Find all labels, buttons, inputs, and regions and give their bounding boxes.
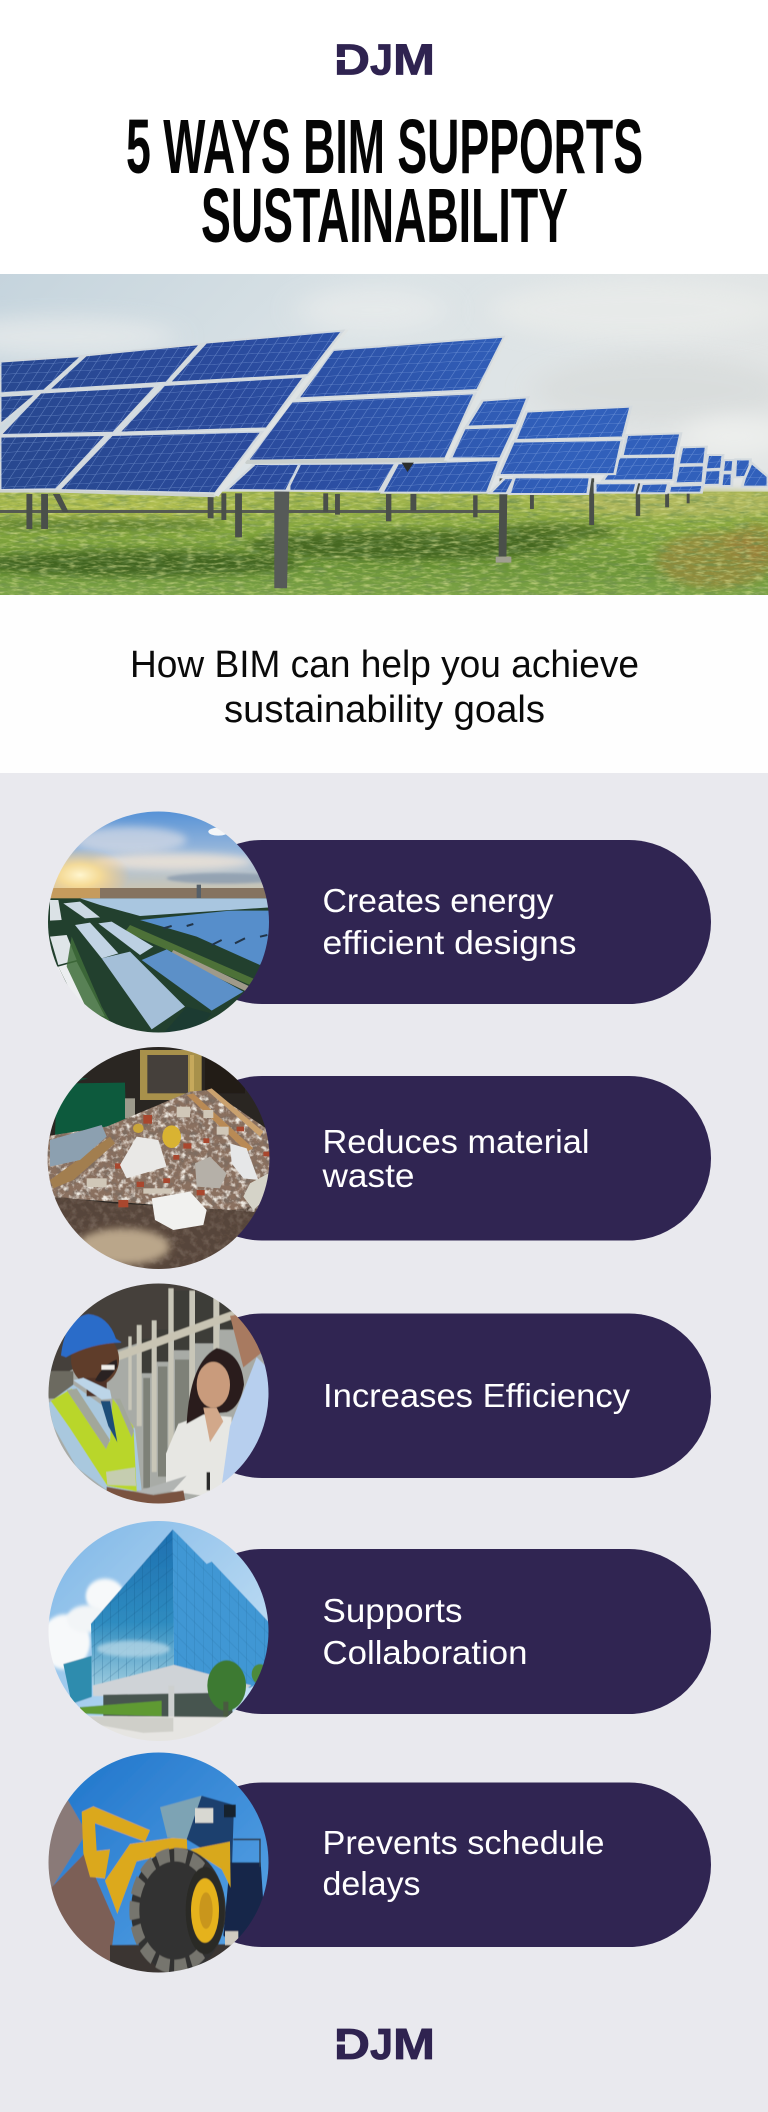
subtitle: How BIM can help you achieve [130, 644, 639, 686]
label 5: delays [322, 1865, 420, 1902]
logo: DJM bottom: J [370, 2020, 393, 2069]
photo: glass office building [48, 1521, 268, 1741]
logo: DJM top [333, 36, 435, 84]
logo: DJM top: M [393, 36, 435, 84]
pill 2 [180, 1076, 711, 1240]
label 1: Creates energy [322, 882, 554, 919]
photo: solar farm at sunset [48, 812, 269, 1032]
support posts and rails [0, 478, 690, 588]
label 1 [322, 882, 576, 961]
label 4: Collaboration [322, 1634, 528, 1671]
label 4 [322, 1592, 528, 1671]
solar panel arrays [0, 329, 768, 497]
label 5 [322, 1824, 604, 1902]
title [126, 104, 643, 259]
label 3: Increases Efficiency [323, 1377, 631, 1414]
photo: yellow wheel loader [43, 1748, 277, 1977]
pill 4 [180, 1549, 711, 1714]
woman in white shirt [166, 1314, 277, 1500]
logo: DJM top: J [370, 36, 393, 84]
list item 1: energy efficient designs [30, 807, 711, 1035]
logo: DJM bottom [333, 2020, 435, 2069]
label 5: Prevents schedule [322, 1824, 604, 1861]
hero photo: solar panels in a field [0, 270, 768, 598]
logo: DJM bottom: M [393, 2020, 435, 2069]
logo: DJM top: D [334, 36, 370, 84]
subtitle [0, 595, 768, 773]
label 2: Reduces material [322, 1123, 590, 1160]
subtitle: sustainability goals [224, 689, 545, 731]
list item 2: material waste [43, 1043, 711, 1280]
photo: engineer and colleague shaking hands [43, 1279, 277, 1509]
label 2 [321, 1123, 590, 1194]
list item 3: efficiency [43, 1279, 711, 1509]
label 4: Supports [322, 1592, 462, 1629]
photo: pile of construction waste [48, 1047, 270, 1269]
label 1: efficient designs [322, 924, 576, 961]
pill 5 [180, 1782, 711, 1947]
man with hard hat and hi-vis vest [48, 1314, 142, 1493]
pill 3 [180, 1314, 711, 1478]
list item 4: collaboration [40, 1518, 711, 1748]
header panel [0, 0, 768, 274]
pill 1 [180, 840, 711, 1004]
label 2: waste [321, 1157, 414, 1194]
list item 5: schedule delays [43, 1748, 711, 1977]
logo: DJM bottom: D [334, 2020, 370, 2069]
